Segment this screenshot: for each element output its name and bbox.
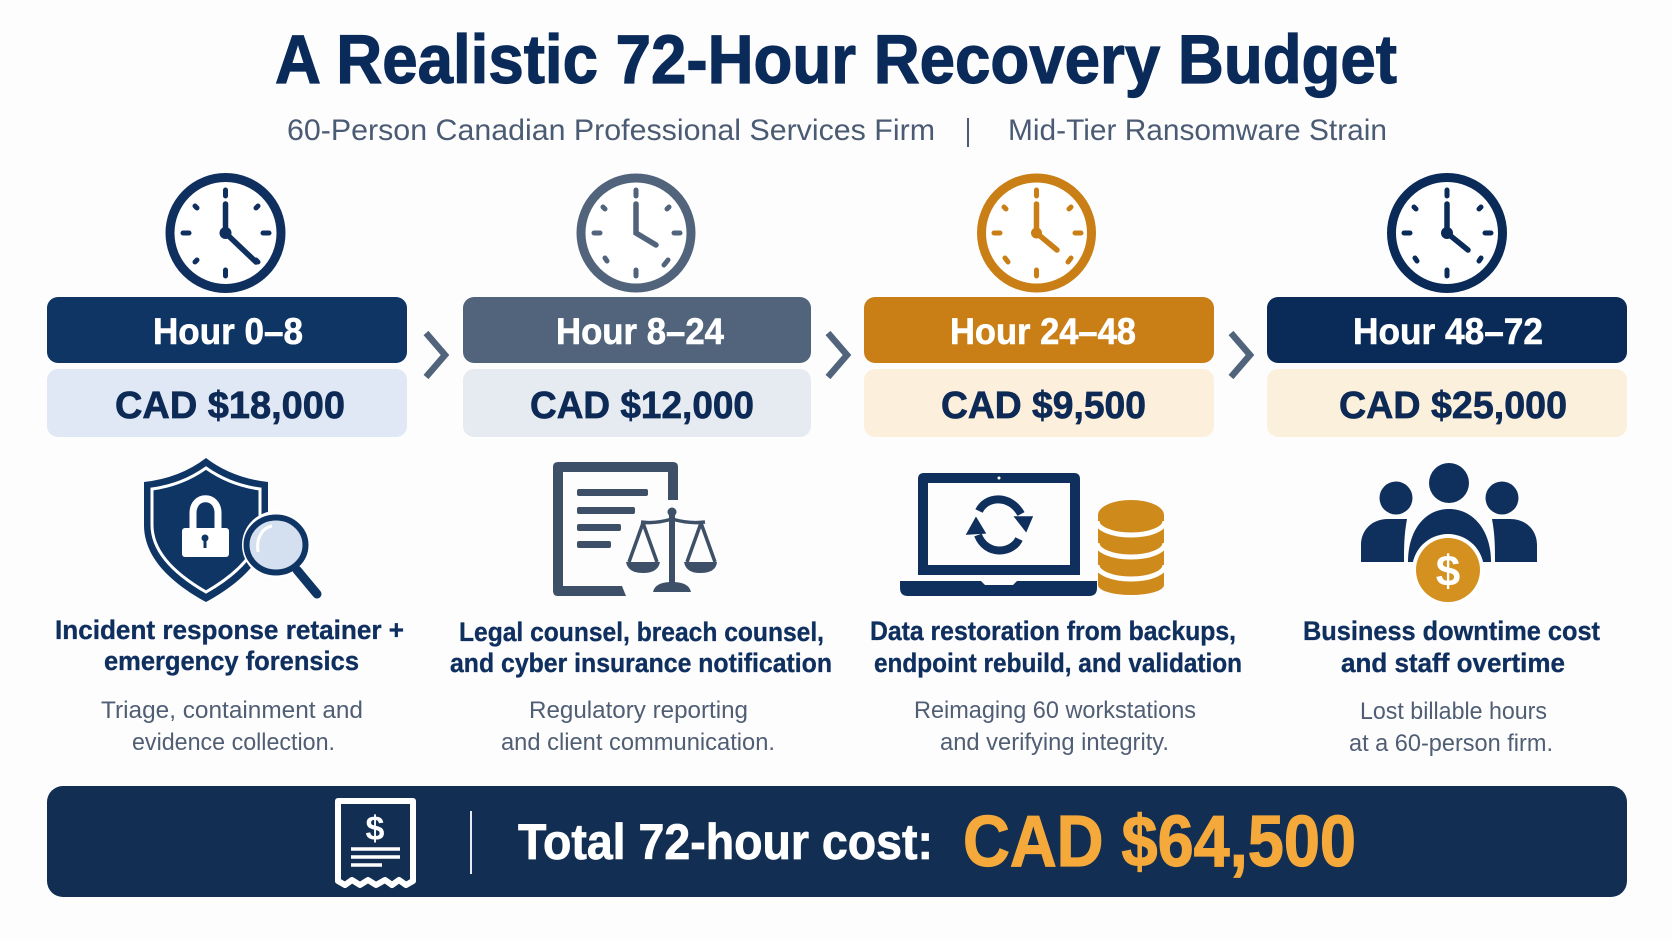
cost box: CAD $18,000 [115, 385, 345, 427]
description [101, 697, 363, 756]
time bar [463, 297, 811, 363]
cost box: CAD $25,000 [1339, 385, 1567, 427]
icon: document with scales [553, 462, 717, 596]
time bar [864, 297, 1214, 363]
icon: receipt: $ [366, 810, 385, 848]
arrow [426, 333, 445, 377]
icon: clock navy [170, 178, 281, 288]
title: A Realistic 72-Hour Recovery Budget [275, 21, 1397, 98]
cost box [463, 369, 811, 437]
time bar: Hour 8–24 [556, 311, 724, 352]
icon: laptop with sync and database [900, 473, 1165, 596]
cost heading: Legal counsel, breach counsel, [459, 617, 824, 647]
cost heading: Data restoration from backups, [870, 616, 1236, 646]
description [914, 697, 1196, 756]
total label: Total 72-hour cost: [518, 814, 933, 870]
description: Lost billable hours [1360, 698, 1547, 725]
cost heading: emergency forensics [104, 646, 359, 676]
time bar: Hour 24–48 [950, 311, 1136, 352]
cost heading: Incident response retainer + [55, 615, 404, 645]
cost heading: Business downtime cost [1303, 616, 1600, 646]
divider [470, 811, 472, 874]
icon: clock dark navy [1392, 178, 1502, 288]
icon: shield with lock and magnifier [144, 458, 317, 602]
subtitle: Mid-Tier Ransomware Strain [1008, 114, 1387, 147]
description [1349, 698, 1553, 757]
description: at a 60-person firm. [1349, 730, 1553, 757]
panel: hour 24-48 [864, 178, 1242, 756]
cost box [1267, 369, 1627, 437]
description [501, 697, 775, 756]
cost box [47, 369, 407, 437]
subtitle: 60-Person Canadian Professional Services Firm [287, 114, 935, 147]
cost heading: endpoint rebuild, and validation [874, 648, 1242, 678]
arrow [1231, 333, 1250, 377]
time bar [47, 297, 407, 363]
icon: team with dollar coin [1361, 463, 1537, 606]
icon: clock amber [982, 178, 1092, 288]
icon: team with dollar coin: $ [1436, 547, 1460, 596]
time bar [1267, 297, 1627, 363]
description: and client communication. [501, 729, 775, 756]
cost box: CAD $9,500 [941, 385, 1146, 427]
cost box [864, 369, 1214, 437]
cost heading [450, 617, 832, 678]
arrow [828, 333, 847, 377]
cost heading: and cyber insurance notification [450, 648, 832, 678]
time bar: Hour 48–72 [1353, 311, 1543, 352]
panel: hour 8-24 [450, 178, 832, 756]
time bar: Hour 0–8 [153, 311, 303, 352]
description: and verifying integrity. [940, 729, 1169, 756]
cost heading [55, 615, 404, 676]
description: Reimaging 60 workstations [914, 697, 1196, 724]
description: evidence collection. [132, 729, 335, 756]
icon: receipt [338, 801, 413, 885]
panel: hour 48-72 [1267, 178, 1627, 757]
description: Triage, containment and [101, 697, 363, 724]
cost heading [870, 616, 1242, 678]
cost heading: and staff overtime [1341, 648, 1565, 678]
total cost banner [47, 786, 1627, 897]
icon: clock slate [581, 178, 691, 288]
description: Regulatory reporting [529, 697, 748, 724]
subtitle [287, 114, 1387, 147]
total amount: CAD $64,500 [963, 802, 1356, 882]
panel: hour 0-8 [47, 178, 407, 756]
cost box: CAD $12,000 [530, 385, 754, 427]
cost heading [1303, 616, 1600, 678]
